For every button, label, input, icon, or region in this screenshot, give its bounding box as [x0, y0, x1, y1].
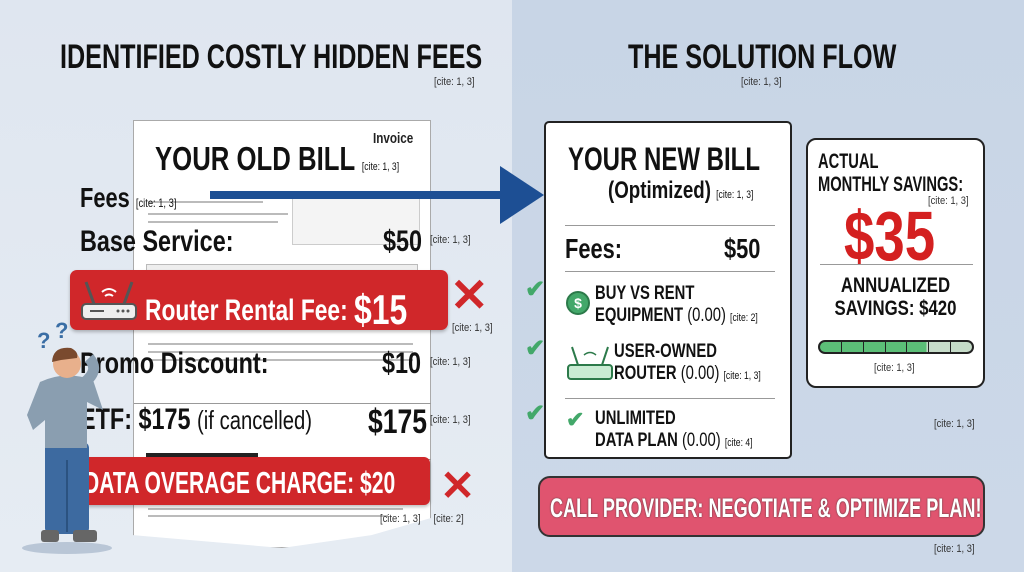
text: base service: Base Service:: [80, 225, 234, 258]
illustration: confused person: [22, 320, 112, 554]
subheading: optimized: (Optimized) [cite: 1, 3]: [608, 177, 753, 204]
cite: [cite: 1, 3]: [452, 322, 493, 334]
banner: data overage charge: [80, 457, 430, 505]
item: unlimited data plan: [595, 408, 752, 451]
icon: router green: [567, 346, 613, 380]
arrow: old to new: [210, 166, 544, 224]
icon: router: [81, 282, 137, 320]
title: right: THE SOLUTION FLOW: [628, 38, 896, 76]
text: promo discount: Promo Discount:: [80, 347, 269, 380]
call to action button: [538, 476, 985, 537]
cite: [cite: 1, 3]: [430, 414, 471, 426]
heading: actual monthly savings: ACTUAL: [818, 150, 878, 173]
text: annualized savings: ANNUALIZED: [841, 274, 950, 297]
icon: dollar coin: $: [574, 295, 582, 311]
heading: your new bill: YOUR NEW BILL: [568, 141, 760, 177]
value: $35: $35: [844, 197, 935, 275]
panel: savings: [cite: 1, 3]: [874, 362, 915, 374]
value: promo: $10: [382, 347, 421, 380]
panel: new bill: [544, 121, 792, 459]
cite: [cite: 1, 3]: [430, 234, 471, 246]
cite: right title: [cite: 1, 3]: [741, 76, 782, 88]
item: buy vs rent: BUY VS RENT: [595, 283, 694, 304]
background left: [0, 0, 512, 572]
text: ✔: [525, 335, 545, 362]
text: ✔: [525, 400, 545, 427]
value: base service: $50: [383, 225, 422, 258]
text: fees: Fees [cite: 1, 3]: [80, 182, 176, 213]
call to action button: CALL PROVIDER: NEGOTIATE & OPTIMIZE PLAN!: [550, 493, 981, 523]
cite: [cite: 1, 3]: [934, 418, 975, 430]
icon: red x 1: ✕: [450, 269, 489, 321]
progress bar: [818, 340, 974, 354]
heading: actual monthly savings: [818, 150, 963, 196]
cite: left title: [cite: 1, 3]: [434, 76, 475, 88]
panel: new bill: $50: [724, 233, 760, 264]
panel: old bill paper: [133, 120, 431, 548]
item: unlimited data plan: UNLIMITED: [595, 408, 676, 429]
panel: savings: [806, 138, 985, 388]
item: buy vs rent: [595, 283, 758, 326]
item: user-owned router: USER-OWNED: [614, 341, 717, 362]
icons: check marks: ✔: [525, 276, 545, 303]
illustration: confused person: ?: [37, 328, 50, 353]
value: etf: $175: [368, 403, 427, 441]
cite: [cite: 1, 3]: [430, 356, 471, 368]
cites: [cite: 1, 3] [cite: 2]: [380, 513, 464, 525]
text: annualized savings: [834, 274, 956, 320]
text: router rental fee: Router Rental Fee: $15: [145, 286, 407, 333]
cite: [cite: 1, 3]: [934, 543, 975, 555]
heading: your old bill: YOUR OLD BILL [cite: 1, 3]: [155, 140, 399, 177]
label: invoice: Invoice: [373, 130, 413, 147]
banner: data overage charge: DATA OVERAGE CHARGE: $20: [84, 465, 395, 500]
panel: savings: [cite: 1, 3]: [928, 195, 969, 207]
item: user-owned router: ROUTER (0.00) [cite: 1, 3]: [614, 363, 761, 384]
text: annualized savings: SAVINGS: $420: [834, 297, 956, 320]
icon: red x 2: ✕: [440, 462, 475, 509]
row: fees: Fees:: [565, 233, 622, 264]
icon: check: ✔: [566, 407, 584, 432]
item: user-owned router: [614, 341, 761, 384]
heading: actual monthly savings: MONTHLY SAVINGS:: [818, 173, 963, 196]
item: unlimited data plan: DATA PLAN (0.00) [cite: 4]: [595, 430, 752, 451]
text: etf: ETF: $175 (if cancelled): [80, 403, 312, 436]
item: buy vs rent: EQUIPMENT (0.00) [cite: 2]: [595, 305, 758, 326]
icon: dollar coin: [566, 291, 590, 315]
title: left: IDENTIFIED COSTLY HIDDEN FEES: [60, 38, 482, 76]
banner: router rental fee: [70, 270, 448, 330]
background right: [512, 0, 1024, 572]
